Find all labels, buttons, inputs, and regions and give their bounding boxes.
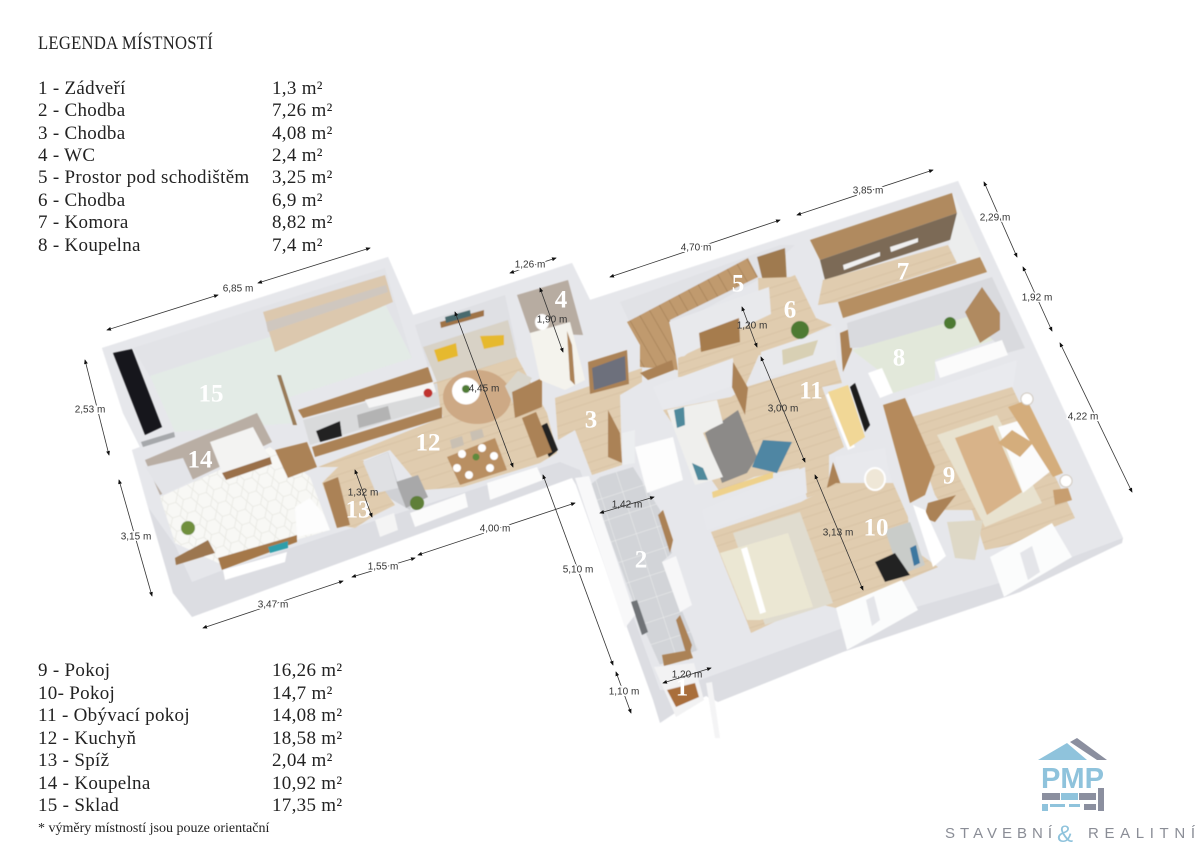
legend: rooms 1 to 8: 1,3 m²: [272, 78, 323, 99]
bathtub: [295, 498, 330, 537]
entrance door: [706, 682, 720, 738]
dimension lines: [85, 170, 1132, 713]
legend: rooms 9 to 15: 11 - Obývací pokoj: [38, 705, 190, 726]
wood cabinet: [275, 442, 317, 478]
dimension labels: 3,15 m: [121, 532, 151, 542]
logo roof: [1038, 738, 1107, 760]
room 9: bedroom: [883, 360, 1075, 550]
legend: rooms 1 to 8: 7,26 m²: [272, 100, 333, 121]
legend: rooms 1 to 8: 6,9 m²: [272, 190, 323, 211]
room numbers: 5: [732, 270, 744, 298]
washbasin cabinet: [210, 427, 272, 480]
legend: rooms 9 to 15: 14 - Koupelna: [38, 773, 151, 794]
legend: rooms 9 to 15: [38, 660, 342, 816]
room numbers: 8: [893, 344, 905, 372]
legend: rooms 9 to 15: 12 - Kuchyň: [38, 728, 136, 749]
room numbers: 6: [784, 296, 796, 324]
armchair: [505, 371, 532, 408]
double bed: [720, 533, 813, 620]
double bed: [998, 420, 1052, 493]
legend: rooms 1 to 8: 4,08 m²: [272, 123, 333, 144]
room 3: corridor: [522, 350, 642, 475]
dimension labels: [75, 186, 1098, 698]
room 12: kitchen and lounge: [298, 295, 557, 527]
room numbers: 2: [635, 546, 647, 574]
heading: legend title: LEGENDA MÍSTNOSTÍ: [38, 32, 213, 54]
dimension labels: 4,70 m: [681, 242, 711, 254]
logo wordmark: STAVEBNÍ: [945, 825, 1053, 842]
windows: [836, 523, 1072, 650]
room 8: bathroom: [847, 277, 1025, 398]
dimension labels: 2,29 m: [980, 212, 1010, 224]
legend: rooms 9 to 15: 2,04 m²: [272, 750, 333, 771]
partition wall with picture: [761, 327, 837, 378]
legend: rooms 9 to 15: 18,58 m²: [272, 728, 342, 749]
dimension labels: 5,10 m: [563, 564, 593, 576]
floor lamp: [865, 468, 885, 490]
legend: rooms 1 to 8: 6 - Chodba: [38, 190, 126, 211]
dimension labels: 6,85 m: [223, 284, 253, 294]
legend: rooms 1 to 8: 7 - Komora: [38, 212, 129, 233]
room 14: bathroom: [145, 413, 330, 580]
dimension labels: 1,10 m: [609, 686, 639, 698]
dimension labels: 1,26 m: [515, 260, 545, 270]
dimension labels: 1,55 m: [368, 562, 398, 572]
legend: rooms 1 to 8: 8,82 m²: [272, 212, 333, 233]
floor plan: [75, 170, 1132, 738]
legend: rooms 1 to 8: 5 - Prostor pod schodištěm: [38, 167, 250, 188]
legend: rooms 9 to 15: 15 - Sklad: [38, 795, 119, 816]
bookcase: [588, 350, 629, 394]
room numbers: 9: [943, 462, 955, 490]
rug: [937, 415, 1042, 527]
legend: rooms 1 to 8: 8 - Koupelna: [38, 235, 141, 256]
room 2: corridor: [575, 437, 698, 665]
wall shelf with books: [440, 310, 484, 328]
white sofa: [667, 400, 723, 485]
logo: PMP Stavební & Realitní: [945, 738, 1196, 848]
logo wordmark: [945, 821, 1196, 848]
desk and chair: [885, 522, 925, 575]
kitchen units: [298, 367, 433, 418]
dimension labels: 1,20 m: [672, 670, 702, 680]
legend: rooms 9 to 15: 10- Pokoj: [38, 683, 115, 704]
kitchen windows: [487, 467, 543, 500]
grey carpet: [705, 410, 757, 483]
legend: rooms 1 to 8: 2,4 m²: [272, 145, 323, 166]
dimension labels: 3,85 m: [853, 186, 883, 196]
room numbers: 11: [799, 378, 823, 404]
round rug: [443, 370, 511, 424]
dimension labels: 1,92 m: [1022, 292, 1052, 304]
wall mass: building silhouette: [102, 181, 1123, 723]
towel radiator: [145, 458, 193, 495]
legend: rooms 1 to 8: [38, 78, 333, 256]
logo letters: PMP: [1041, 763, 1104, 795]
dimension labels: 4,45 m: [469, 384, 499, 394]
dimension labels: 3,00 m: [768, 404, 798, 414]
room numbers: 14: [188, 446, 213, 474]
legend: rooms 1 to 8: 3 - Chodba: [38, 123, 126, 144]
legend: rooms 1 to 8: 4 - WC: [38, 145, 95, 166]
dimension labels: 3,13 m: [823, 528, 853, 538]
legend: rooms 9 to 15: 9 - Pokoj: [38, 660, 110, 681]
room numbers: 10: [864, 514, 888, 542]
door: [512, 378, 542, 418]
black radiator: [113, 349, 162, 435]
room 15: storage: [113, 268, 412, 447]
room 7: pantry: [810, 193, 987, 318]
low wall: [712, 472, 773, 498]
room numbers: 4: [555, 286, 568, 314]
footnote: * výměry místností jsou pouze orientační: [38, 821, 269, 836]
room 4: WC: [517, 280, 585, 390]
room 11: living room: [640, 358, 898, 530]
room 6: corridor: [669, 275, 852, 387]
door mat: [667, 683, 699, 707]
legend: rooms 9 to 15: 13 - Spíž: [38, 750, 109, 771]
room 5: under-stairs space with staircase: [620, 245, 795, 370]
room 13: pantry: [322, 452, 398, 537]
legend: rooms 9 to 15: 16,26 m²: [272, 660, 342, 681]
logo wordmark: &: [1057, 821, 1073, 848]
wood bench and plants: [218, 535, 297, 570]
dimension labels: 4,00 m: [480, 524, 510, 534]
sofa: [423, 320, 517, 382]
legend: rooms 1 to 8: 1 - Zádveří: [38, 78, 126, 99]
dimension labels: 1,90 m: [537, 314, 567, 326]
logo bricks: [1042, 788, 1104, 811]
dimension labels: 2,53 m: [75, 404, 105, 416]
room numbers: 12: [416, 430, 440, 456]
legend: rooms 1 to 8: 3,25 m²: [272, 167, 333, 188]
room numbers: 3: [585, 406, 597, 434]
legend: rooms 9 to 15: 10,92 m²: [272, 773, 342, 794]
dimension labels: 1,32 m: [348, 488, 378, 498]
legend: rooms 9 to 15: 14,08 m²: [272, 705, 342, 726]
shelving unit: [263, 275, 393, 352]
room numbers: 1: [676, 674, 688, 702]
room numbers: [188, 258, 955, 702]
dining table: [447, 438, 507, 485]
room numbers: 7: [897, 258, 909, 286]
blue armchair: [752, 440, 792, 473]
logo wordmark: REALITNÍ: [1088, 825, 1196, 842]
room 1: entrance: [654, 650, 720, 738]
partition wall with shelf: [669, 287, 771, 358]
dimension labels: 4,22 m: [1068, 412, 1098, 422]
legend: rooms 1 to 8: 2 - Chodba: [38, 100, 126, 121]
room numbers: 13: [346, 496, 370, 524]
TV unit: [826, 391, 855, 450]
legend: rooms 1 to 8: 7,4 m²: [272, 235, 323, 256]
room numbers: 15: [198, 380, 224, 408]
dimension labels: 1,20 m: [737, 320, 767, 332]
room 10: bedroom: [711, 468, 983, 633]
legend: rooms 9 to 15: 14,7 m²: [272, 683, 333, 704]
dimension labels: 1,42 m: [612, 500, 642, 510]
dimension labels: 3,47 m: [258, 600, 288, 610]
legend: rooms 9 to 15: 17,35 m²: [272, 795, 342, 816]
